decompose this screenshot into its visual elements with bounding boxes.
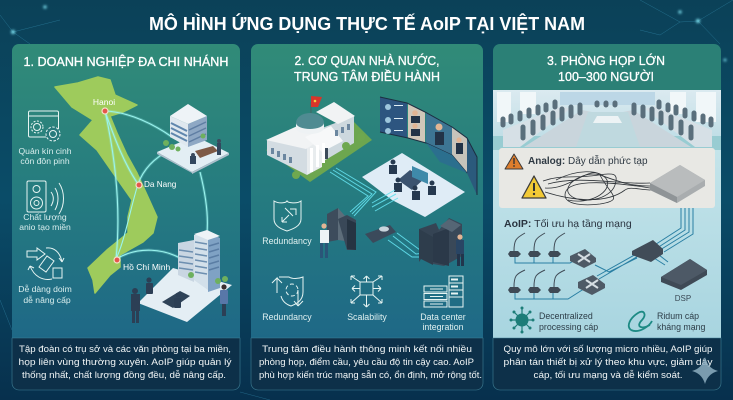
title: MÔ HÌNH ỨNG DỤNG THỰC TẾ AoIP TẠI VIỆT NAM [149,13,585,34]
analog label: Analog: Dây dẫn phức tạp [528,154,648,167]
sparkle watermark [692,357,718,384]
caption 1: họp liên vùng thường xuyên. AoIP giúp quản lý [18,357,232,368]
icon: data center [424,276,463,307]
label: ridum cáp [657,311,706,332]
label: data center integration: Data center [420,312,466,322]
heading 3: 3. PHÒNG HỌP LỚN [547,53,665,68]
caption 1: thống nhất, chất lượng đồng đều, dễ nâng cấp. [22,370,226,381]
label: quản kín cinh [18,146,72,166]
label: decentralized: processing cáp [539,322,598,332]
caption 3: cáp, tối ưu mạng và dễ kiểm soát. [534,370,682,381]
DSP device: DSP [675,294,691,303]
city: Ho Chi Minh [114,257,171,272]
icon: large warning [522,176,546,198]
label: data center integration [420,312,466,332]
microphones [508,233,565,293]
city: Da Nang: Da Nang [144,180,177,189]
network cables [330,168,428,257]
label: chất lượng: anio tạo miền [19,222,71,232]
illustration: government building [266,96,372,182]
caption 3: phân tán thiết bị xử lý theo khu vực, giảm dây [504,357,713,368]
label: decentralized [539,311,598,332]
label: chất lượng [19,212,71,232]
caption 2: Trung tâm điều hành thông minh kết nối nhiều [262,344,472,355]
icon: cable [629,312,652,331]
icon: small warning [505,154,523,169]
heading 3: 100–300 NGƯỜI [558,69,654,84]
label: quản kín cinh: côn đôn pinh [20,156,70,166]
label: dễ dàng: dễ nâng cấp [23,295,71,305]
city: Hanoi: Hanoi [93,97,115,107]
label: decentralized: Decentralized [539,311,593,321]
panel: cơ quan nhà nước [251,44,483,390]
label: redundancy 1: Redundancy [262,236,312,246]
illustration: meeting platform [362,153,465,217]
panel: doanh nghiệp đa chi nhánh [12,44,240,390]
heading 1: 1. DOANH NGHIỆP ĐA CHI NHÁNH [24,54,228,69]
caption 1: Tập đoàn có trụ sở và các văn phòng tại ba miền, [19,344,231,355]
label: ridum cáp: Ridum cáp [657,311,699,321]
cables from mixer to switch [515,208,693,299]
illustration: conference hall [493,90,721,150]
label: quản kín cinh: Quản kín cinh [18,146,72,156]
office illustration: tower and meeting [157,104,229,174]
label: dễ dàng: Dễ dàng doim [18,284,72,294]
icon: scalability arrows [351,276,382,307]
city: Ho Chi Minh: Hồ Chí Minh [123,262,171,272]
caption 2: phòng họp, điểm cầu, yêu cầu độ tin cậy cao. AoIP [259,357,474,368]
panel: phòng họp lớn [493,44,721,390]
heading 3 [547,53,665,84]
office illustration: towers and team [131,230,232,323]
icon: decentralized processing [510,306,534,334]
label: redundancy 2: Redundancy [262,312,312,322]
illustration: curved video wall [380,97,477,195]
DSP device [661,259,707,303]
map of Vietnam [55,77,157,293]
city: Hanoi [93,97,115,114]
tangled cables [543,172,652,205]
caption 2: phù hợp kiến trúc mạng sẵn có, ổn định, mở rộng tốt. [259,370,482,381]
heading 2 [294,53,440,84]
icon: upgrade cycle [27,248,64,279]
label: ridum cáp: kháng mạng [657,322,706,332]
caption 3 [493,338,721,390]
caption 3: Quy mô lớn với số lượng micro nhiều, AoIP giúp [504,344,712,355]
icon: window with gears [28,111,60,142]
network links between cities [105,111,207,259]
core switch [632,240,663,262]
edge switches [570,249,605,295]
icon: redundancy cycle shield [272,277,303,306]
analog card [499,148,715,208]
heading 2: 2. CƠ QUAN NHÀ NƯỚC, [294,53,440,68]
label: data center integration: integration [422,322,464,332]
caption 2 [251,338,483,390]
label: dễ dàng [18,284,72,305]
heading 2: TRUNG TÂM ĐIỀU HÀNH [294,69,440,84]
icon: speaker and sound waves [27,181,64,214]
label: chất lượng: Chất lượng [23,212,67,222]
label: scalability: Scalability [347,312,387,322]
mixer device [650,165,705,203]
icon: redundancy shield [274,201,301,231]
lower light area [493,150,721,338]
illustration: server racks and technician [320,208,464,266]
AoIP label: AoIP: Tối ưu hạ tầng mạng [504,218,632,230]
caption 1 [12,338,240,390]
